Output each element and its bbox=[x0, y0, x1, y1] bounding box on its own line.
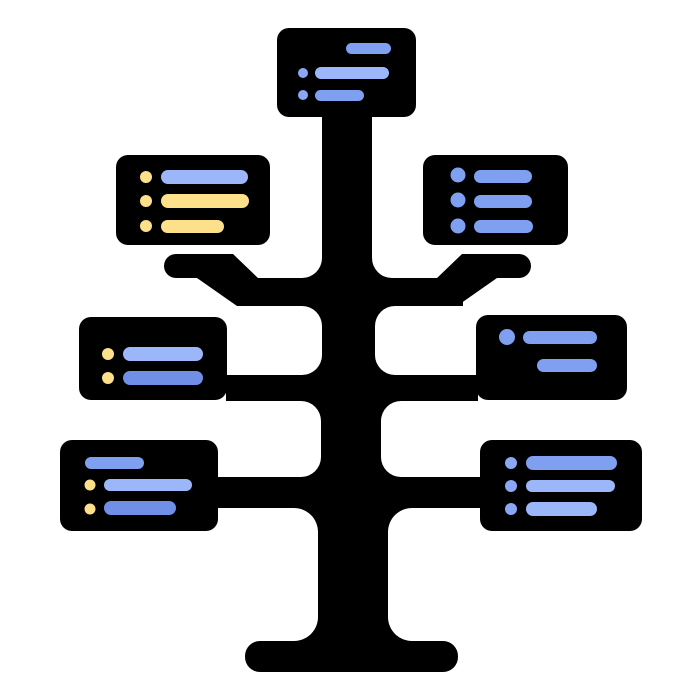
box: top bbox=[277, 28, 416, 117]
box: right 1 bbox=[423, 155, 568, 245]
box: left 2 bbox=[79, 317, 227, 400]
box: left 1 bbox=[116, 155, 270, 245]
box: right 3 bbox=[480, 440, 642, 531]
box: right 2 bbox=[476, 315, 627, 400]
tree trunk and branches bbox=[150, 110, 568, 672]
box: left 3 bbox=[60, 440, 218, 531]
